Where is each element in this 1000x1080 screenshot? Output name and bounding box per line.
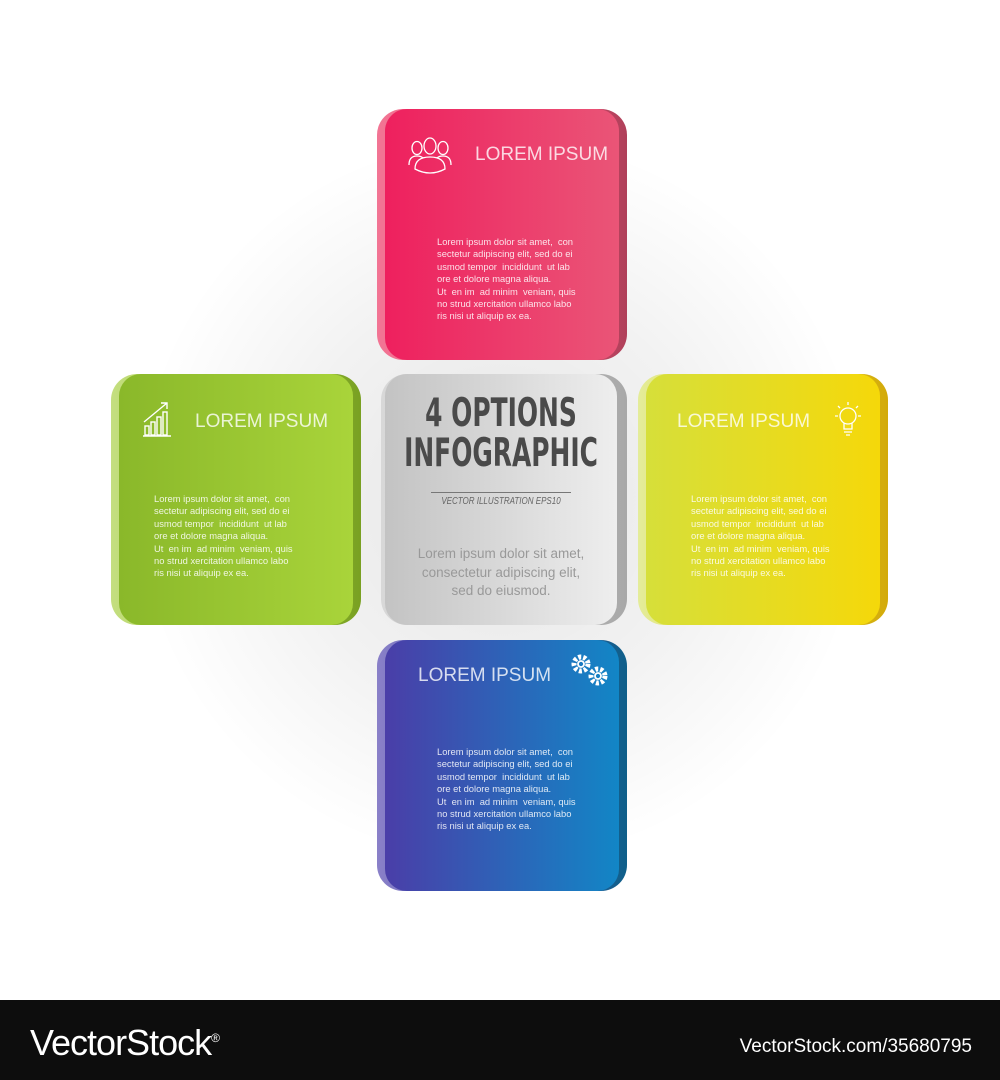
text block: ris nisi ut aliquip ex ea. <box>154 567 249 578</box>
text block: consectetur adipiscing elit, <box>422 564 580 580</box>
card: center gray <box>381 374 627 625</box>
heading: 4 options infographic: INFOGRAPHIC <box>404 431 598 476</box>
text block: ore et dolore magna aliqua. <box>437 273 551 284</box>
heading: LOREM IPSUM <box>475 144 608 165</box>
text block <box>154 493 293 578</box>
text block: Ut en im ad minim veniam, quis <box>691 543 830 554</box>
text block: no strud xercitation ullamco labo <box>154 555 288 566</box>
text block: usmod tempor incididunt ut lab <box>154 518 287 529</box>
icon: gears <box>572 654 608 686</box>
text block: ore et dolore magna aliqua. <box>437 783 551 794</box>
footer: VectorStock.com/35680795 <box>740 1036 972 1057</box>
text block: sectetur adipiscing elit, sed do ei <box>691 505 826 516</box>
text block <box>437 746 576 831</box>
text block: Lorem ipsum dolor sit amet, <box>418 546 584 561</box>
text block: ris nisi ut aliquip ex ea. <box>437 820 532 831</box>
text block: sectetur adipiscing elit, sed do ei <box>154 505 290 516</box>
card: top pink <box>377 109 627 360</box>
subtitle: VECTOR ILLUSTRATION EPS10 <box>441 496 561 507</box>
text block: ris nisi ut aliquip ex ea. <box>691 567 786 578</box>
text block <box>418 546 584 598</box>
text block: usmod tempor incididunt ut lab <box>437 261 570 272</box>
text block: no strud xercitation ullamco labo <box>691 555 825 566</box>
text block: ore et dolore magna aliqua. <box>154 530 268 541</box>
text block: Lorem ipsum dolor sit amet, con <box>437 236 573 247</box>
text block: Ut en im ad minim veniam, quis <box>437 796 576 807</box>
heading: 4 options infographic <box>404 391 598 476</box>
text block <box>437 236 576 321</box>
card: right yellow <box>638 374 888 625</box>
text block: no strud xercitation ullamco labo <box>437 808 571 819</box>
text block: Lorem ipsum dolor sit amet, con <box>154 493 290 504</box>
text block: no strud xercitation ullamco labo <box>437 298 571 309</box>
heading: LOREM IPSUM <box>195 411 328 432</box>
heading: LOREM IPSUM <box>418 665 551 686</box>
icon: people <box>408 137 452 174</box>
text block: Lorem ipsum dolor sit amet, con <box>437 746 573 757</box>
icon: chart <box>143 402 171 437</box>
footer: VectorStock® <box>30 1022 219 1063</box>
text block: usmod tempor incididunt ut lab <box>691 518 824 529</box>
text block <box>691 493 830 578</box>
card: left green <box>111 374 361 625</box>
text block: sed do eiusmod. <box>451 583 551 598</box>
text block: Ut en im ad minim veniam, quis <box>154 543 293 554</box>
text block: usmod tempor incididunt ut lab <box>437 771 570 782</box>
text block: sectetur adipiscing elit, sed do ei <box>437 758 572 769</box>
heading: 4 options infographic: 4 OPTIONS <box>425 391 577 436</box>
text block: ore et dolore magna aliqua. <box>691 530 805 541</box>
text block: Lorem ipsum dolor sit amet, con <box>691 493 827 504</box>
heading: LOREM IPSUM <box>677 411 810 432</box>
icon: bulb <box>835 402 861 436</box>
text block: sectetur adipiscing elit, sed do ei <box>437 248 572 259</box>
footer <box>0 1000 1000 1080</box>
text block: ris nisi ut aliquip ex ea. <box>437 310 532 321</box>
card: bottom blue <box>377 640 627 891</box>
text block: Ut en im ad minim veniam, quis <box>437 286 576 297</box>
